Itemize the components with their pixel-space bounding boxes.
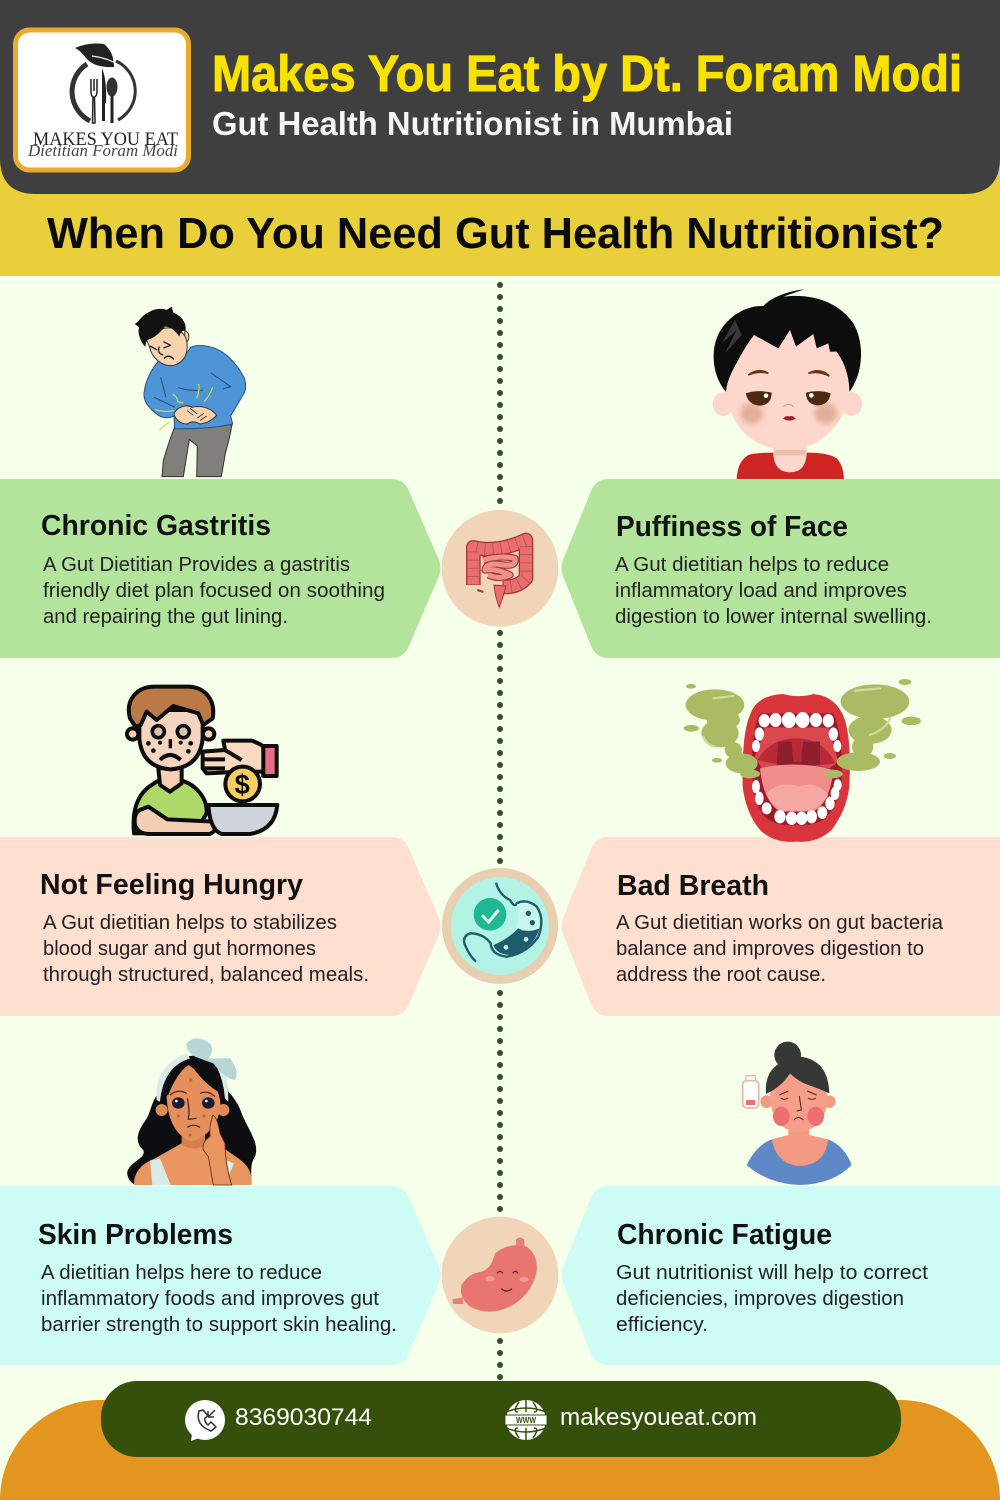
text: chronic gastritis	[43, 554, 385, 628]
icon: girl with skin problems	[127, 1038, 256, 1185]
phone number: 8369030744	[235, 1404, 372, 1431]
subtitle: Gut Health Nutritionist in Mumbai	[212, 105, 733, 142]
text: bad breath: A Gut dietitian works on gut bacteria	[616, 912, 944, 934]
text: puffiness: A Gut dietitian helps to reduce	[615, 554, 889, 576]
icon: globe: WWW	[516, 1416, 536, 1425]
text: bad breath: balance and improves digestion to	[616, 938, 924, 960]
icon: puffy-faced boy	[713, 289, 862, 479]
icon: acne boy with bowl	[127, 687, 277, 834]
logo: Dietitian Foram Modi	[27, 141, 178, 160]
heading: hungry: Not Feeling Hungry	[40, 869, 303, 901]
text: hungry: through structured, balanced meals.	[43, 964, 369, 986]
heading: fatigue: Chronic Fatigue	[617, 1219, 832, 1251]
icon: smiling stomach	[442, 1217, 558, 1333]
text: hungry: A Gut dietitian helps to stabilizes	[43, 912, 337, 934]
heading: puffiness: Puffiness of Face	[616, 511, 848, 543]
panel: bad breath	[562, 837, 1000, 1016]
logo: MAKES YOU EAT	[33, 129, 178, 150]
text: fatigue: deficiencies, improves digestion	[616, 1288, 904, 1310]
icon: acne boy with bowl: $	[235, 769, 250, 800]
website: makesyoueat.com	[560, 1404, 757, 1431]
panel: chronic gastritis	[0, 479, 440, 658]
panel: puffiness of face	[562, 479, 1000, 658]
text: skin	[41, 1262, 397, 1336]
header bar	[0, 0, 1000, 194]
text: hungry: blood sugar and gut hormones	[43, 938, 316, 960]
text: chronic gastritis: A Gut Dietitian Provides a gastritis	[43, 554, 350, 576]
icon: healthy stomach check	[442, 868, 558, 984]
text: fatigue: Gut nutritionist will help to correct	[616, 1262, 928, 1284]
text: puffiness: digestion to lower internal swelling.	[615, 606, 932, 628]
text: bad breath: address the root cause.	[616, 964, 826, 986]
text: chronic gastritis: friendly diet plan focused on soothing	[43, 580, 385, 602]
text: fatigue: efficiency.	[616, 1314, 708, 1336]
text: skin: A dietitian helps here to reduce	[41, 1262, 322, 1284]
heading: chronic gastritis: Chronic Gastritis	[41, 510, 271, 542]
panel: not feeling hungry	[0, 837, 440, 1016]
text: skin: barrier strength to support skin healing.	[41, 1314, 397, 1336]
heading: When Do You Need Gut Health Nutritionist?	[47, 209, 944, 258]
icon: stomach-ache boy	[135, 307, 246, 477]
text: chronic gastritis: and repairing the gut lining.	[43, 606, 288, 628]
icon: globe	[505, 1400, 547, 1440]
icon: intestines	[442, 510, 558, 627]
text: bad breath	[616, 912, 944, 986]
text: puffiness: inflammatory load and improves	[615, 580, 907, 602]
footer	[0, 1381, 1000, 1500]
contact pill	[101, 1381, 901, 1457]
panel: chronic fatigue	[562, 1186, 1000, 1365]
icon: tired woman	[743, 1042, 852, 1185]
heading: skin: Skin Problems	[38, 1219, 233, 1251]
heading: bad breath: Bad Breath	[617, 870, 769, 902]
text: puffiness	[615, 554, 932, 628]
panel: skin problems	[0, 1186, 440, 1365]
dotted centre line	[497, 285, 503, 1378]
text: fatigue	[616, 1262, 928, 1336]
icon: open mouth with bad breath	[684, 679, 921, 842]
text: hungry	[43, 912, 369, 986]
logo	[16, 30, 188, 170]
icon: phone	[185, 1400, 225, 1441]
text: skin: inflammatory foods and improves gut	[41, 1288, 379, 1310]
heading band	[0, 150, 1000, 276]
